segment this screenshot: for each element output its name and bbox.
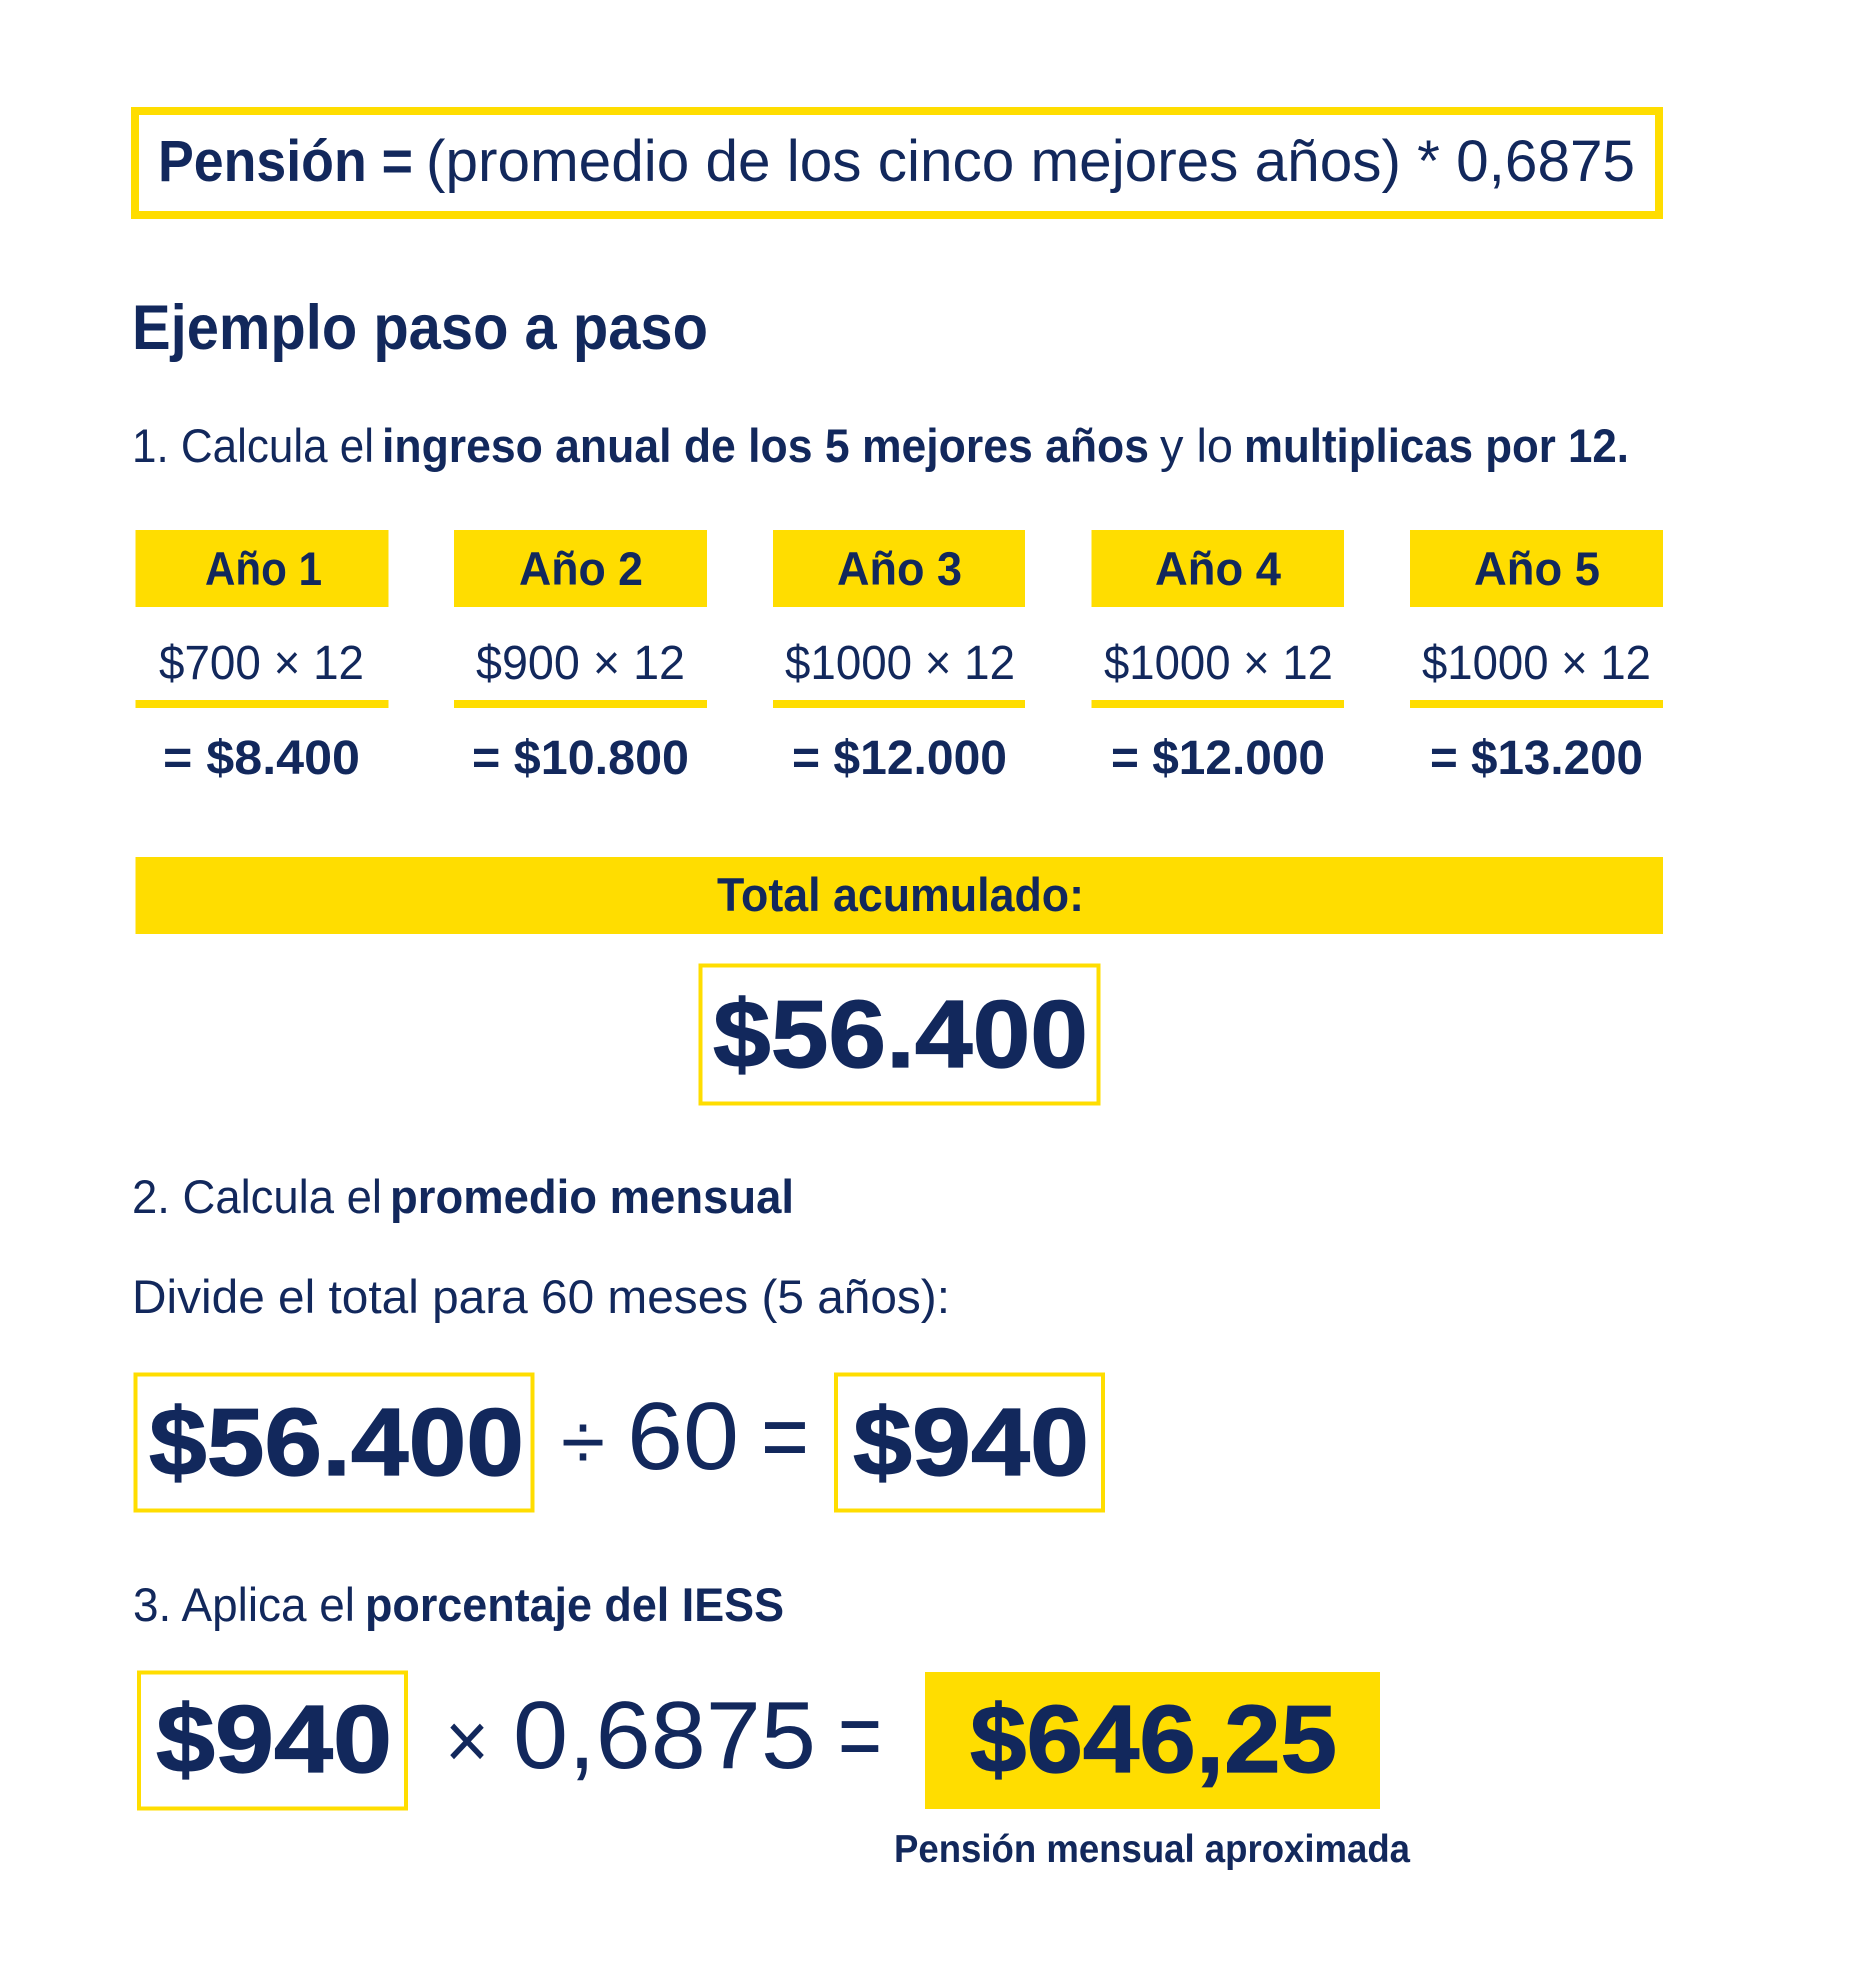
total acumulado bar: Total acumulado: [717,868,1084,921]
column: año 1 [136,530,388,785]
operator: divide by 60: = [761,1383,809,1490]
box: monthly average: $940 [853,1389,1089,1496]
formula box: Pensión = [158,129,413,194]
step 2 text: promedio mensual [390,1170,794,1223]
result box: $646,25 [970,1686,1337,1793]
operator: divide by 60: 60 [627,1383,739,1490]
column: año 5: = $13.200 [1430,732,1643,785]
step 2 instruction: Divide el total para 60 meses (5 años): [132,1270,950,1323]
operator: divide by 60 [561,1383,809,1490]
column: año 2: = $10.800 [472,732,689,785]
column: año 5: Año 5 [1474,542,1600,595]
column: año 3 [773,530,1025,785]
step 2 text [132,1170,794,1223]
box: dividend: $56.400 [149,1389,524,1496]
multiplication equation [139,1672,1380,1809]
column: año 4: Año 4 [1155,542,1281,595]
operator: divide by 60: ÷ [561,1397,605,1486]
result caption: Pensión mensual aproximada [894,1828,1410,1871]
result box [925,1672,1380,1809]
box: monthly average: $940 [156,1686,392,1793]
column: año 2: Año 2 [519,542,643,595]
formula box [135,111,1659,215]
column: año 4: $1000 × 12 [1104,637,1333,690]
column: año 2: $900 × 12 [476,637,685,690]
step 1 text: ingreso anual de los 5 mejores años [382,419,1149,472]
column: año 3: = $12.000 [792,732,1007,785]
step 3 text: 3. Aplica el [133,1578,355,1631]
operator: times 0,6875 [445,1682,882,1789]
total acumulado bar [136,857,1663,934]
heading: ejemplo paso a paso: Ejemplo paso a paso [132,293,708,363]
column: año 5: $1000 × 12 [1422,637,1651,690]
formula box: (promedio de los cinco mejores años) * 0,6875 [426,129,1635,194]
step 1 text: 1. Calcula el [132,419,374,472]
box: monthly average [139,1672,406,1808]
box: monthly average [836,1374,1103,1510]
column: año 1: $700 × 12 [159,637,364,690]
column: año 4 [1092,530,1344,785]
column: año 2 [454,530,707,785]
operator: times 0,6875: = [838,1682,882,1789]
step 1 text: y lo [1160,419,1233,472]
step 3 text: porcentaje del IESS [365,1578,784,1631]
column: año 5 [1410,530,1663,785]
box: dividend [136,1374,532,1510]
column: año 1: = $8.400 [163,732,360,785]
column: año 1: Año 1 [205,542,322,595]
column: año 3: Año 3 [837,542,962,595]
step 2 text: 2. Calcula el [132,1170,382,1223]
step 3 text [133,1578,784,1631]
division equation [136,1374,1103,1510]
step 1 text [132,419,1629,472]
column: año 4: = $12.000 [1111,732,1325,785]
operator: times 0,6875: × [445,1696,489,1785]
total value box: $56.400 [713,981,1088,1088]
step 1 text: multiplicas por 12. [1244,419,1629,472]
total value box [700,966,1098,1104]
operator: times 0,6875: 0,6875 [513,1682,816,1789]
column: año 3: $1000 × 12 [785,637,1015,690]
